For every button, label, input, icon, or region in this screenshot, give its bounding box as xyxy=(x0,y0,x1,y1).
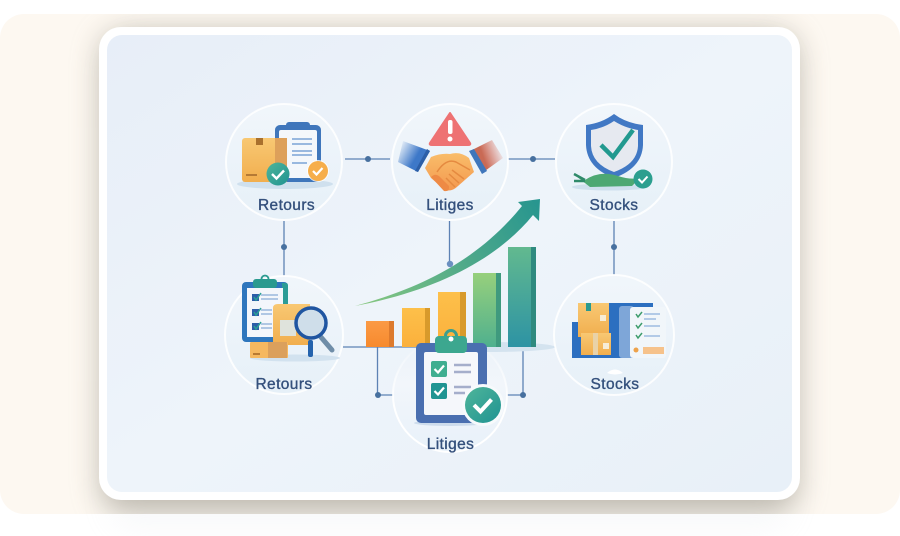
disc: Litiges bottom xyxy=(393,338,507,452)
label: Stocks xyxy=(591,376,639,393)
icon: clipboard, box and magnifier xyxy=(242,276,340,362)
label: Retours xyxy=(258,197,315,214)
faint outer shadow xyxy=(110,40,790,530)
icon: warning and handshake xyxy=(398,113,503,191)
label: Litiges xyxy=(426,197,474,214)
badge: orange check xyxy=(307,160,329,182)
label: Retours xyxy=(255,376,313,393)
bar 5 xyxy=(508,247,536,347)
node: Litiges top xyxy=(392,104,508,220)
node: Retours lower xyxy=(225,276,343,394)
chart ground shadow xyxy=(425,342,555,352)
label: Stocks xyxy=(590,197,638,214)
node: Retours top xyxy=(226,104,342,220)
bar 2 xyxy=(402,308,430,347)
card shadow xyxy=(101,32,798,512)
growth arrow xyxy=(355,199,540,306)
bar 1 xyxy=(366,321,394,347)
badge: large check xyxy=(462,384,504,426)
card panel xyxy=(107,35,792,492)
label: Litiges xyxy=(427,436,474,453)
growth chart xyxy=(366,247,555,352)
bar 4 xyxy=(473,273,501,347)
icon: warehouse shelf and checklist xyxy=(572,303,666,374)
icon: clipboard with checks xyxy=(414,330,504,426)
node: Stocks lower xyxy=(554,275,674,395)
bar 3 xyxy=(438,292,466,347)
card frame xyxy=(99,27,800,500)
badge: check xyxy=(634,170,652,188)
connector lines xyxy=(281,156,617,398)
node: Litiges bottom xyxy=(414,330,504,453)
node: Stocks top xyxy=(556,104,672,220)
icon: box and clipboard xyxy=(237,122,333,189)
icon: shield xyxy=(572,114,652,190)
badge: green check xyxy=(266,162,290,186)
